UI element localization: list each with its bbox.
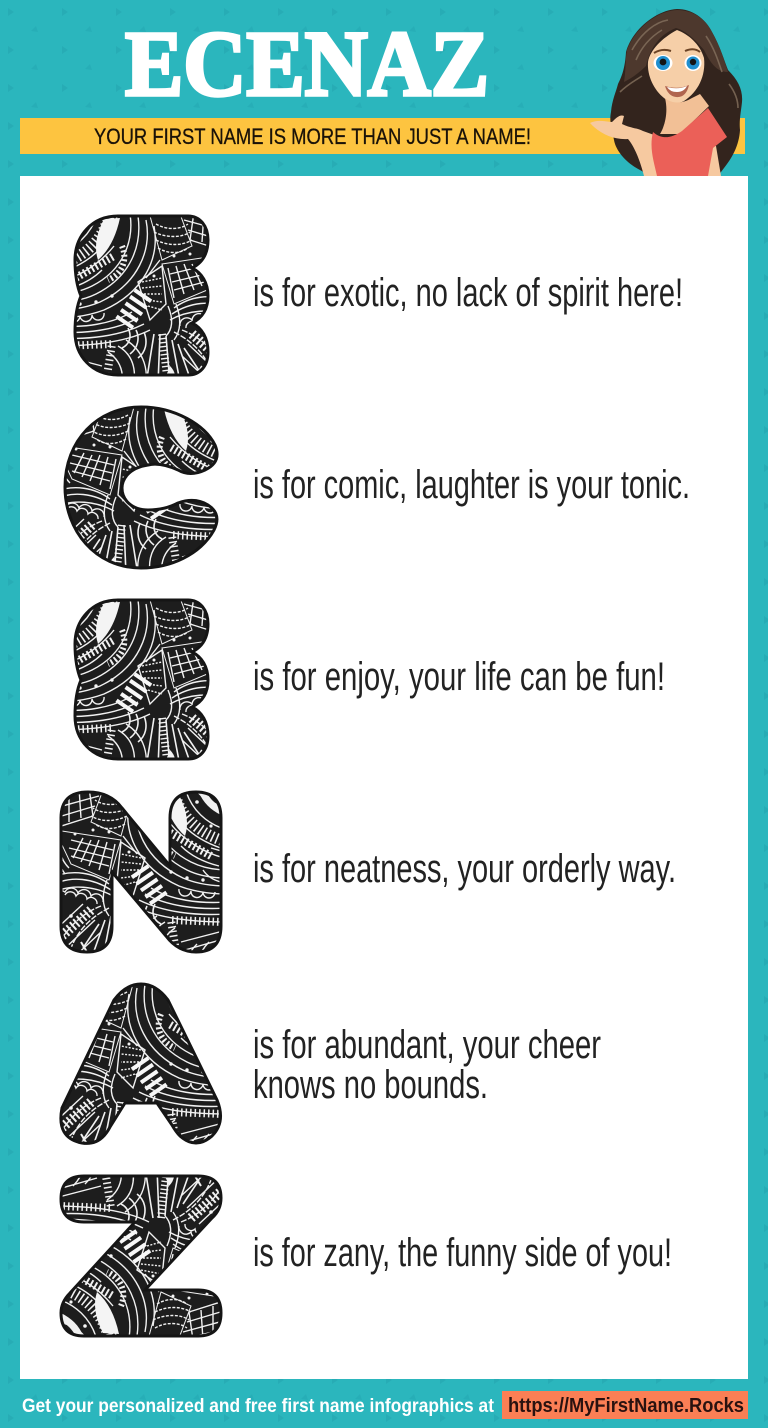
text: abundant: knows no bounds. [253, 1063, 488, 1107]
row: C comic [64, 406, 688, 570]
footer call to action: Get your personalized and free first name infographics at [22, 1396, 495, 1417]
letter N [60, 790, 222, 954]
subtitle banner: YOUR FIRST NAME IS MORE THAN JUST A NAME! [94, 124, 531, 149]
face [648, 30, 704, 103]
text: abundant [253, 1023, 601, 1107]
row: N neatness [60, 790, 674, 954]
letter Z [60, 1174, 222, 1338]
smile [665, 85, 689, 97]
subtitle banner [20, 118, 745, 154]
text: abundant: is for abundant, your cheer [253, 1023, 601, 1067]
panel: name letters [20, 176, 748, 1379]
footer url badge: https://MyFirstName.Rocks [508, 1395, 744, 1417]
neck and shoulder [660, 94, 709, 134]
letter E second [74, 598, 210, 760]
row: E exotic [74, 214, 680, 376]
eyes [654, 49, 702, 71]
right arm [706, 146, 721, 176]
illustration: woman presenting [590, 9, 742, 176]
row: Z zany [60, 1174, 670, 1338]
title: ECENAZ [125, 13, 489, 116]
shirt [652, 108, 727, 176]
row: E enjoy [74, 598, 662, 760]
row: A abundant [59, 982, 600, 1145]
left arm and hand [590, 115, 658, 176]
letter A [59, 982, 222, 1145]
letter C [64, 406, 219, 570]
letter E [74, 214, 210, 376]
